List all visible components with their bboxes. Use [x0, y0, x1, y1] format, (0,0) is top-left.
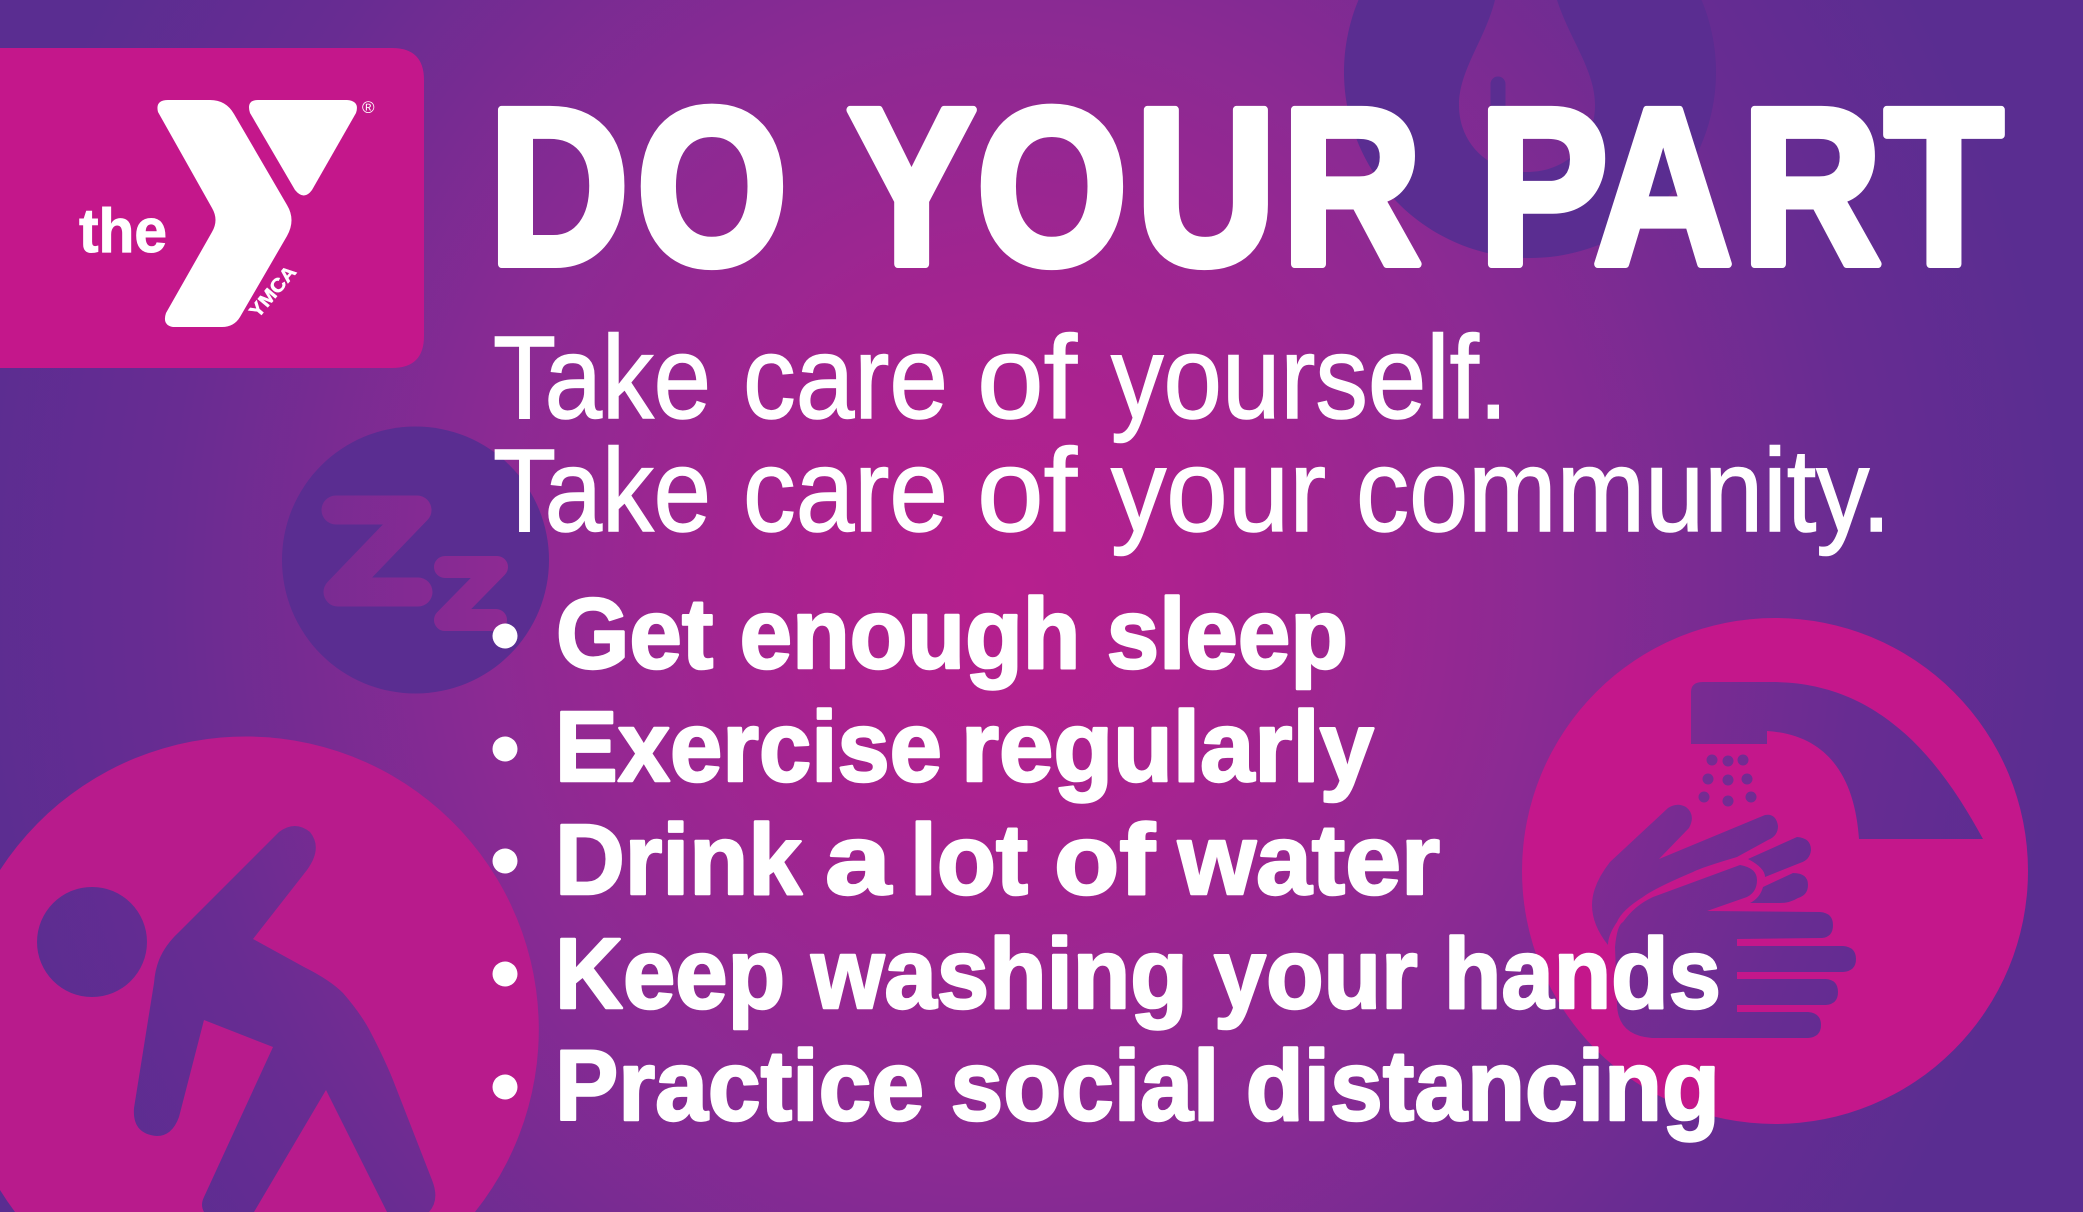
item: drink a lot of water: water: [1177, 804, 1440, 916]
icon: person exercising: [0, 736, 539, 1212]
item: drink a lot of water: Drink: [555, 804, 802, 916]
faucet: [1691, 682, 1983, 839]
item: exercise regularly: [492, 691, 1374, 803]
subtitle: of: [977, 312, 1077, 444]
panel: YMCA logo card: [0, 48, 424, 368]
item: drink a lot of water: lot: [910, 804, 1028, 916]
logo: registered mark: ®: [362, 98, 375, 117]
icon: sleep Zz: [282, 426, 549, 694]
icon: water drop: [1344, 0, 1716, 258]
item: exercise regularly: Exercise: [555, 691, 942, 803]
subtitle: Take: [493, 425, 711, 557]
item: get enough sleep: Get enough sleep: [556, 578, 1348, 690]
logo: Y right triangle: [249, 100, 357, 196]
subtitle: community.: [1356, 425, 1891, 557]
subtitle: care: [743, 312, 948, 444]
subtitle: of: [977, 425, 1077, 557]
subtitle: [493, 312, 1891, 557]
item: exercise regularly: regularly: [961, 691, 1374, 803]
upper hand: [1592, 805, 1811, 945]
subtitle: care: [743, 425, 948, 557]
checklist: [492, 578, 1721, 1142]
item: drink a lot of water: of: [1054, 804, 1156, 916]
water drops: [1698, 754, 1756, 806]
subtitle: your: [1111, 425, 1326, 557]
item: drink a lot of water: a: [825, 804, 893, 916]
logo: the: the: [79, 197, 167, 266]
icon: hand washing: [1522, 618, 2028, 1124]
subtitle: Take: [493, 312, 711, 444]
item: keep washing your hands: Keep washing your hands: [555, 918, 1721, 1030]
logo: Y left stroke: [157, 100, 292, 327]
item: practice social distancing: Practice social distancing: [555, 1030, 1720, 1142]
lower hand: [1615, 865, 1856, 1038]
logo: YMCA: YMCA: [246, 262, 301, 322]
title: DO YOUR PART: [488, 62, 2003, 312]
subtitle: yourself.: [1111, 312, 1508, 444]
item: drink a lot of water: [492, 804, 1440, 916]
